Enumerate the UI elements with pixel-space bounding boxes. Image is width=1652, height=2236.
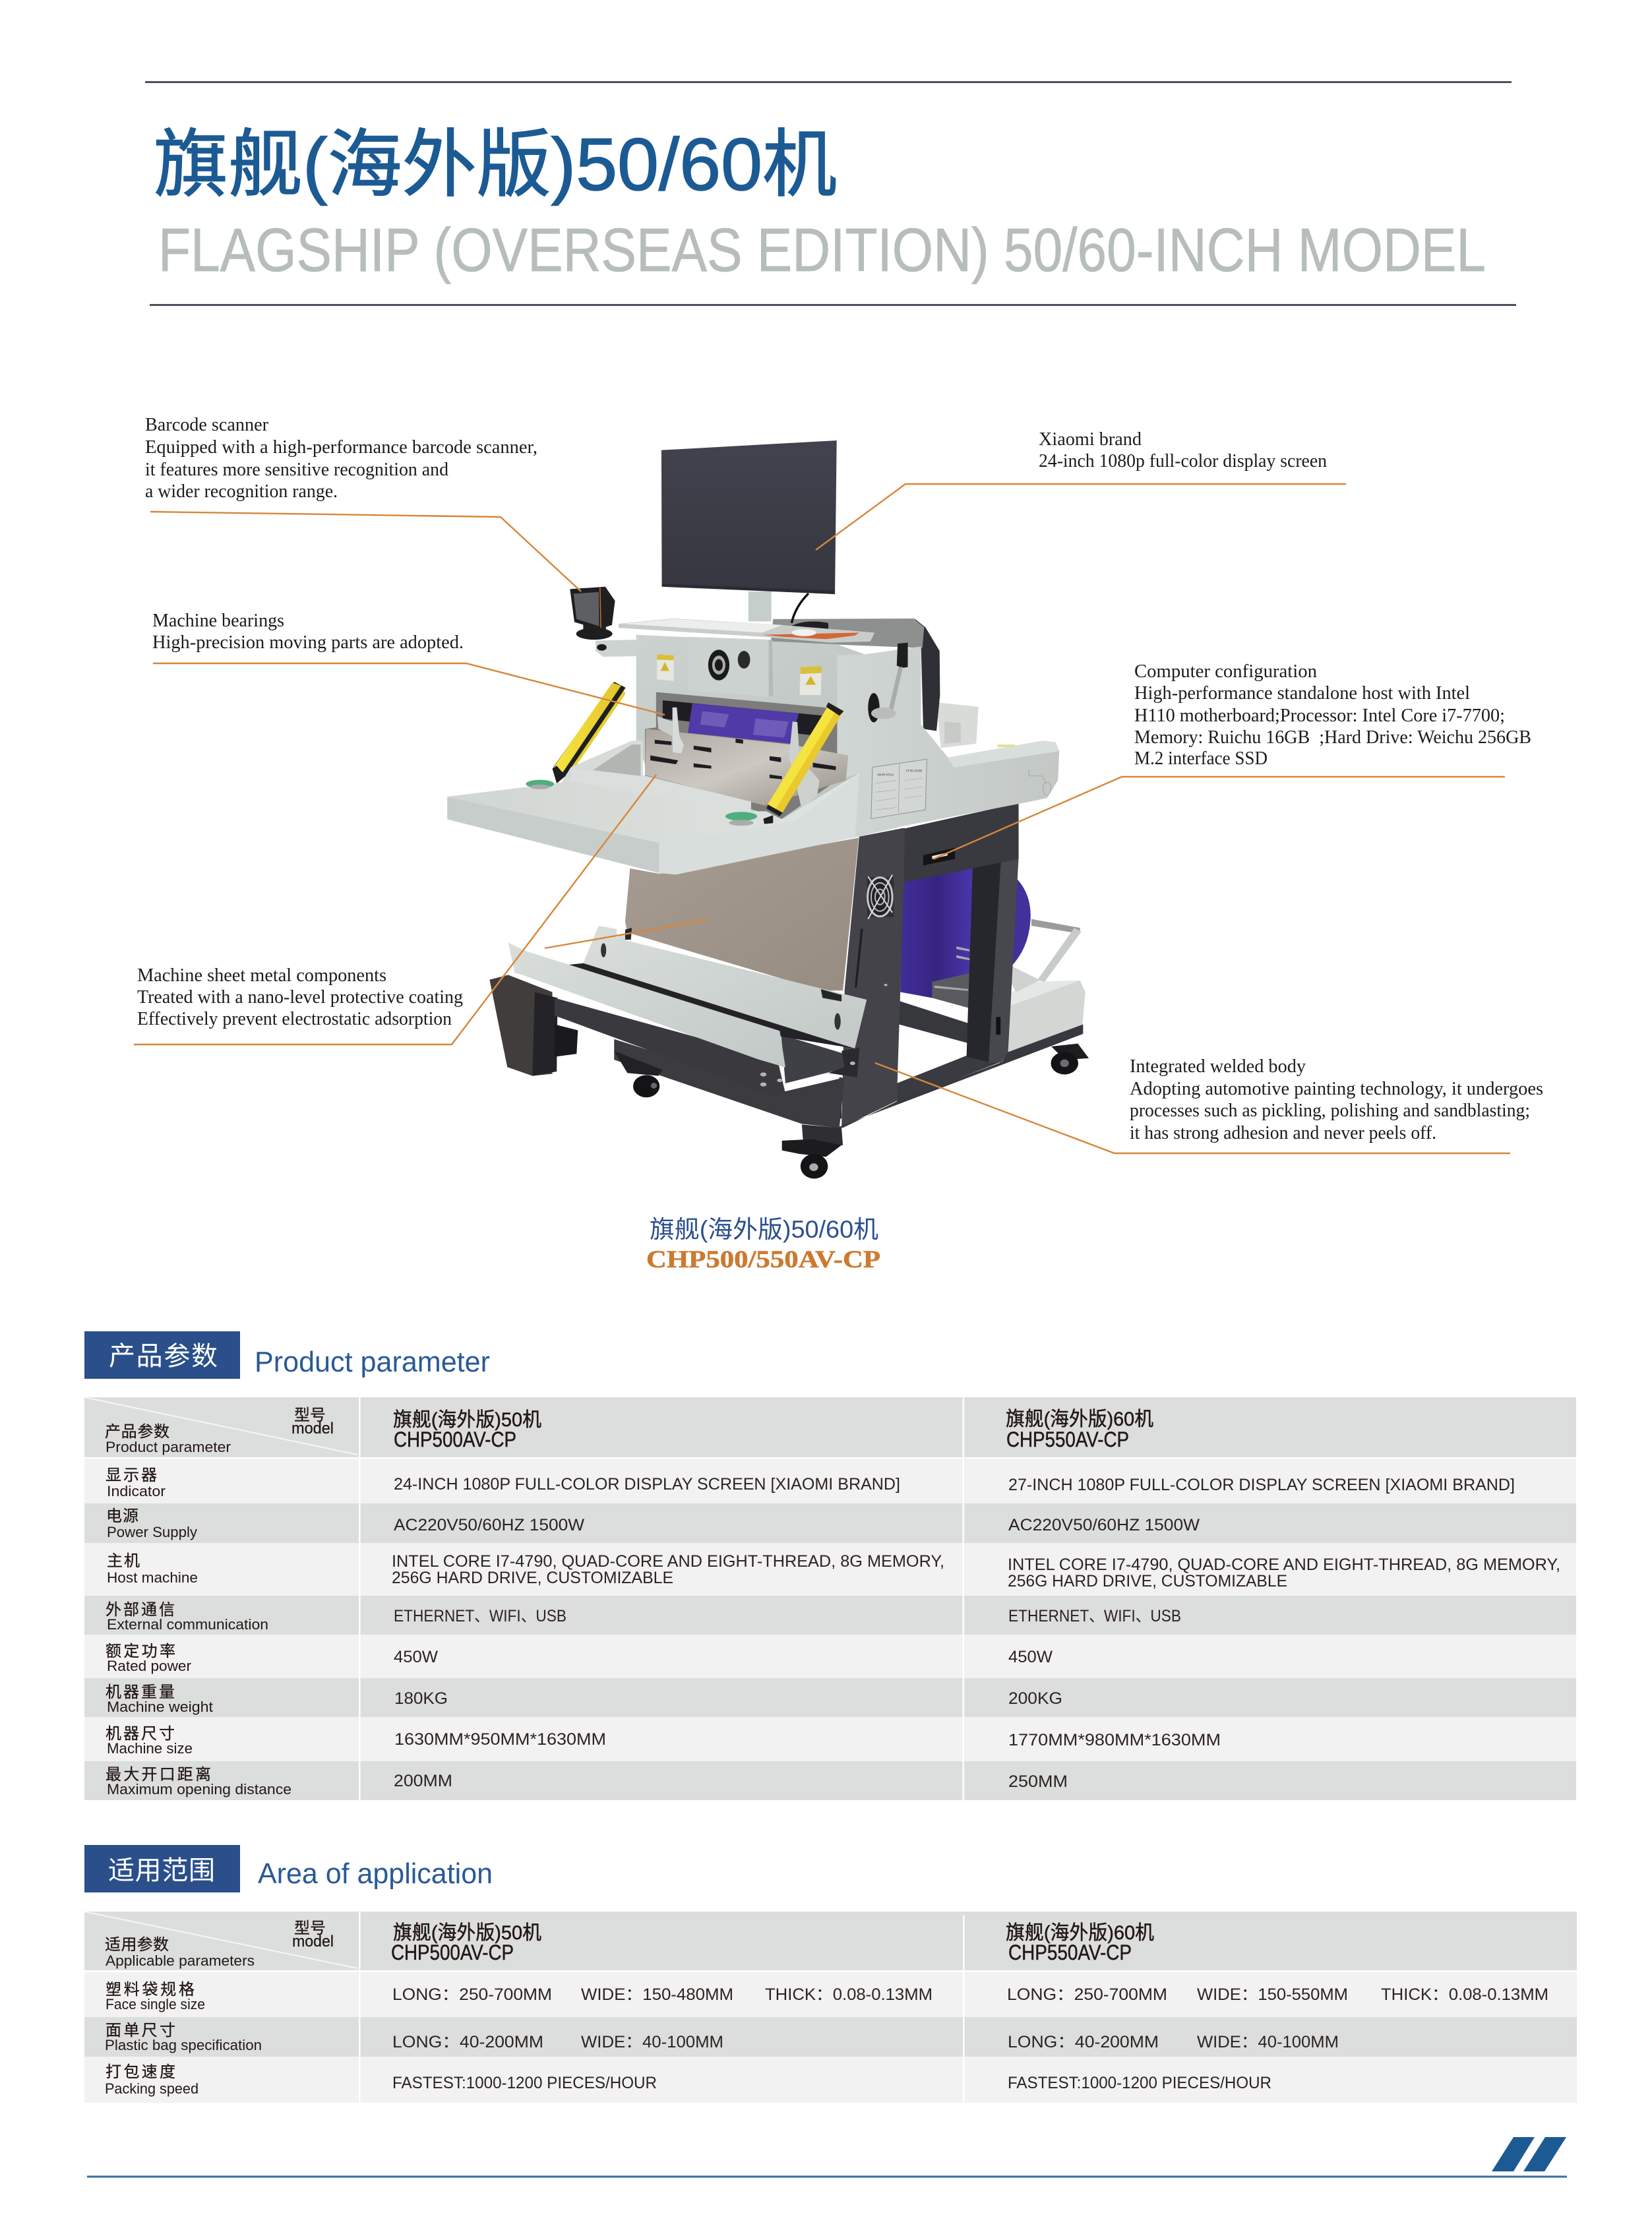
side label plate: 开机流程 <box>905 769 923 773</box>
row: host machine <box>107 1552 1560 1590</box>
roll handle <box>1031 919 1080 934</box>
lower body <box>614 1039 845 1128</box>
table header: 型号 <box>294 1919 326 1937</box>
row: power supply: AC220V50/60HZ 1500W <box>394 1516 584 1534</box>
side label plate: 保养项目 <box>877 773 894 777</box>
callout: Xiaomi display: Xiaomi brand <box>1039 429 1142 450</box>
table header: 型号 <box>294 1406 326 1424</box>
side panel <box>837 646 1059 837</box>
machine upper body <box>447 440 1059 874</box>
section heading: product parameter: 产品参数 <box>109 1342 218 1371</box>
row: external communication: 外部通信 <box>106 1601 175 1619</box>
opening <box>645 692 837 819</box>
leader: welded body <box>875 1063 1510 1153</box>
row: packing speed: FASTEST:1000-1200 PIECES/HOUR <box>392 2074 657 2092</box>
callout: sheet metal components <box>134 775 707 1044</box>
callout: computer configuration: High-performance standalone host with Intel <box>1134 682 1470 704</box>
row: face single size: WIDE：150-480MM <box>581 1985 733 2004</box>
callout: integrated welded body: Integrated welded body <box>1130 1056 1306 1077</box>
section heading: product parameter <box>84 1331 490 1379</box>
row: power supply: Power Supply <box>107 1524 197 1540</box>
row: packing speed: 打包速度 <box>106 2063 175 2081</box>
row: plastic bag specification <box>105 2022 1339 2053</box>
row: indicator: 24-INCH 1080P FULL-COLOR DISPLAY SCREEN [XIAOMI BRAND] <box>394 1475 900 1494</box>
row: machine weight: Machine weight <box>107 1699 213 1715</box>
callout: integrated welded body: it has strong adhesion and never peels off. <box>1130 1122 1436 1143</box>
row: machine size <box>106 1725 1221 1757</box>
callout: machine bearings <box>152 610 665 715</box>
table header: 适用参数 <box>105 1936 169 1954</box>
rear dark housing <box>915 619 940 731</box>
callout: barcode scanner <box>145 414 581 591</box>
row: external communication: External communication <box>107 1616 268 1633</box>
rear hopper plate <box>583 926 867 1048</box>
callout: integrated welded body: Adopting automotive painting technology, it undergoes <box>1130 1078 1543 1099</box>
right caster <box>1051 1044 1089 1074</box>
callout: barcode scanner: Barcode scanner <box>145 414 268 435</box>
row: face single size <box>106 1981 1548 2012</box>
row: face single size: THICK：0.08-0.13MM <box>1381 1985 1548 2004</box>
row: machine size: 1770MM*980MM*1630MM <box>1008 1731 1221 1749</box>
emergency button left <box>526 766 566 789</box>
leader: computer <box>933 777 1505 859</box>
table header: 旗舰(海外版)60机 <box>1006 1922 1154 1944</box>
monitor stand <box>749 591 772 621</box>
row: external communication: ETHERNET、WIFI、USB <box>1008 1607 1181 1625</box>
cooling fan <box>867 875 894 919</box>
table: product parameters <box>84 1397 1576 1800</box>
keyboard shelf <box>619 619 874 643</box>
title: English: FLAGSHIP (OVERSEAS EDITION) 50/60-INCH MODEL <box>158 216 1486 284</box>
row: indicator: 27-INCH 1080P FULL-COLOR DISPLAY SCREEN [XIAOMI BRAND] <box>1008 1476 1515 1494</box>
monitor screen <box>661 440 837 594</box>
leader: sheet metal panel <box>545 920 707 948</box>
control box <box>688 637 773 697</box>
row: host machine: INTEL CORE I7-4790, QUAD-CORE AND EIGHT-THREAD, 8G MEMORY, <box>392 1552 944 1571</box>
row: external communication <box>106 1601 1181 1633</box>
table backgrounds <box>84 1912 1577 2103</box>
handwheel diagram <box>1029 770 1051 795</box>
table header: model <box>291 1420 334 1437</box>
rear paper cup holder <box>936 702 979 748</box>
display slot <box>923 848 955 865</box>
row: packing speed: Packing speed <box>105 2080 199 2097</box>
monitor cable <box>791 593 809 623</box>
row: power supply <box>106 1507 1200 1540</box>
front hopper plate <box>508 942 785 1068</box>
table header: model <box>292 1933 334 1950</box>
sheet metal back panel <box>625 838 859 990</box>
row: plastic bag specification: WIDE：40-100MM <box>581 2033 723 2051</box>
row: indicator: Indicator <box>107 1483 166 1499</box>
rear lower frame <box>899 1001 972 1044</box>
purple bag <box>688 704 799 744</box>
row: rated power <box>106 1643 1053 1674</box>
roller <box>663 700 824 737</box>
row: maximum opening distance: Maximum opening distance <box>107 1781 291 1798</box>
row: rated power: Rated power <box>107 1658 191 1674</box>
row: face single size: THICK：0.08-0.13MM <box>765 1985 933 2004</box>
row: plastic bag specification: WIDE：40-100MM <box>1197 2033 1339 2051</box>
emergency button right <box>725 812 773 826</box>
leader: display <box>816 484 1346 550</box>
conveyor beam <box>555 998 785 1097</box>
row: plastic bag specification: 面单尺寸 <box>106 2022 175 2040</box>
guide fingers <box>673 708 684 753</box>
footer rule <box>87 2176 1567 2177</box>
row: machine weight: 200KG <box>1008 1689 1062 1708</box>
knob <box>738 651 750 669</box>
callout: integrated welded body: processes such as pickling, polishing and sandblasting; <box>1130 1100 1530 1121</box>
table header: CHP500AV-CP <box>391 1941 514 1964</box>
table header: CHP550AV-CP <box>1006 1428 1129 1451</box>
leader: bearings <box>153 663 665 715</box>
section heading: area of application <box>84 1845 493 1892</box>
middle caster <box>614 1051 663 1097</box>
table: area of application <box>84 1912 1577 2103</box>
barcode scanner <box>570 587 615 640</box>
row: rated power: 450W <box>394 1648 438 1666</box>
row: packing speed: FASTEST:1000-1200 PIECES/HOUR <box>1008 2074 1271 2092</box>
left leg <box>489 975 552 1076</box>
warning stickers <box>657 654 822 695</box>
scanner arm <box>596 640 637 657</box>
work table right edge <box>659 773 859 874</box>
row: packing speed <box>105 2063 1271 2097</box>
table header: CHP500AV-CP <box>394 1428 516 1451</box>
top frame beam <box>903 803 1019 882</box>
table header: 旗舰(海外版)50机 <box>393 1409 541 1431</box>
row: machine size: Machine size <box>107 1740 193 1757</box>
callout: barcode scanner: a wider recognition range. <box>145 481 338 502</box>
callout: integrated welded body <box>875 1056 1543 1153</box>
callout: Xiaomi display <box>816 429 1346 550</box>
machine caption <box>646 1216 880 1273</box>
row: machine weight: 180KG <box>394 1689 448 1708</box>
callout: machine bearings: Machine bearings <box>152 610 284 631</box>
callout: computer configuration <box>933 661 1531 859</box>
table header: CHP550AV-CP <box>1008 1941 1132 1964</box>
metal plate <box>645 729 848 805</box>
right safety light curtain <box>766 702 843 816</box>
table header: Applicable parameters <box>106 1952 255 1969</box>
leader: sheet metal <box>134 775 656 1044</box>
row: plastic bag specification: Plastic bag specification <box>105 2037 262 2053</box>
left safety light curtain <box>553 682 626 777</box>
body base <box>636 635 864 837</box>
side arm top <box>948 740 1059 767</box>
section heading: area of application: Area of application <box>258 1858 493 1890</box>
hopper inner <box>593 744 640 776</box>
right column <box>967 860 1002 1062</box>
row: face single size: LONG：250-700MM <box>1007 1985 1167 2004</box>
row: host machine: 256G HARD DRIVE, CUSTOMIZABLE <box>392 1569 673 1587</box>
side label plate <box>871 759 927 819</box>
feed slots <box>650 739 836 779</box>
row: host machine: 256G HARD DRIVE, CUSTOMIZABLE <box>1008 1572 1287 1590</box>
work table left edge <box>447 797 659 873</box>
row: external communication: ETHERNET、WIFI、USB <box>394 1607 566 1625</box>
callout: barcode scanner: Equipped with a high-performance barcode scanner, <box>145 437 537 458</box>
lever and knob <box>868 643 908 723</box>
table header: Product parameter <box>106 1439 231 1455</box>
leader: scanner <box>150 512 581 591</box>
table header: 产品参数 <box>105 1423 169 1441</box>
section heading: area of application: 适用范围 <box>108 1856 215 1885</box>
purple film <box>900 867 974 998</box>
machine caption: 旗舰(海外版)50/60机 <box>650 1216 878 1243</box>
conveyor belt <box>781 1035 845 1083</box>
row: maximum opening distance <box>106 1766 1068 1798</box>
bottom front beam <box>828 1025 1083 1131</box>
table header <box>105 1406 1153 1455</box>
dark hopper gap <box>561 963 855 1048</box>
bolts <box>760 984 888 1087</box>
section heading: product parameter: Product parameter <box>255 1346 490 1378</box>
callout: sheet metal components: Effectively prevent electrostatic adsorption <box>137 1008 452 1029</box>
title: Chinese: 旗舰(海外版)50/60机 <box>154 123 837 206</box>
work table top <box>447 740 859 843</box>
header rule bottom <box>150 304 1516 306</box>
row: machine weight: 机器重量 <box>106 1683 175 1701</box>
callout: computer configuration: Computer configuration <box>1134 661 1317 682</box>
main column <box>841 828 905 1128</box>
row: host machine: Host machine <box>107 1569 198 1586</box>
table header: 旗舰(海外版)50机 <box>393 1922 541 1944</box>
row: host machine: INTEL CORE I7-4790, QUAD-CORE AND EIGHT-THREAD, 8G MEMORY, <box>1008 1556 1560 1574</box>
row: host machine: 主机 <box>107 1552 140 1570</box>
row: machine size: 机器尺寸 <box>106 1725 175 1743</box>
row: indicator <box>106 1466 1515 1499</box>
callout: machine bearings: High-precision moving parts are adopted. <box>152 632 464 653</box>
front caster <box>782 1124 843 1178</box>
row: face single size: LONG：250-700MM <box>392 1985 552 2004</box>
callout: barcode scanner: it features more sensitive recognition and <box>145 459 448 480</box>
row: maximum opening distance: 250MM <box>1008 1772 1068 1791</box>
row: power supply: AC220V50/60HZ 1500W <box>1008 1516 1200 1534</box>
callout: computer configuration: Memory: Ruichu 16GB ;Hard Drive: Weichu 256GB <box>1134 727 1531 748</box>
table backgrounds <box>84 1397 1576 1800</box>
callout: sheet metal components: Treated with a nano-level protective coating <box>137 986 463 1008</box>
row: machine weight <box>106 1683 1062 1715</box>
row: rated power: 额定功率 <box>106 1643 175 1660</box>
fan grille <box>708 650 729 680</box>
row: face single size: WIDE：150-550MM <box>1197 1985 1348 2004</box>
table header: 旗舰(海外版)60机 <box>1006 1408 1153 1430</box>
row: plastic bag specification: LONG：40-200MM <box>1008 2033 1159 2051</box>
row: face single size: 塑料袋规格 <box>106 1981 195 1999</box>
purple roll <box>1011 876 1031 967</box>
footer logo slashes <box>1492 2137 1566 2171</box>
header rule top <box>145 81 1512 83</box>
callout: sheet metal components: Machine sheet metal components <box>137 965 386 986</box>
row: maximum opening distance: 200MM <box>394 1772 452 1790</box>
callout: computer configuration: M.2 interface SSD <box>1134 748 1268 769</box>
machine caption: CHP500/550AV-CP <box>646 1246 880 1273</box>
row: indicator: 显示器 <box>106 1466 157 1484</box>
row: maximum opening distance: 最大开口距离 <box>106 1766 211 1784</box>
row: machine size: 1630MM*950MM*1630MM <box>394 1730 606 1749</box>
table header <box>105 1919 1154 1969</box>
right base box <box>1007 981 1086 1055</box>
row: rated power: 450W <box>1008 1648 1053 1666</box>
machine lower structure <box>489 803 1089 1178</box>
row: power supply: 电源 <box>106 1507 138 1525</box>
callout: Xiaomi display: 24-inch 1080p full-color display screen <box>1039 450 1327 471</box>
machine illustration <box>447 440 1089 1178</box>
row: plastic bag specification: LONG：40-200MM <box>392 2033 543 2051</box>
callout: computer configuration: H110 motherboard;Processor: Intel Core i7-7700; <box>1134 705 1505 726</box>
row: face single size: Face single size <box>106 1996 205 2012</box>
